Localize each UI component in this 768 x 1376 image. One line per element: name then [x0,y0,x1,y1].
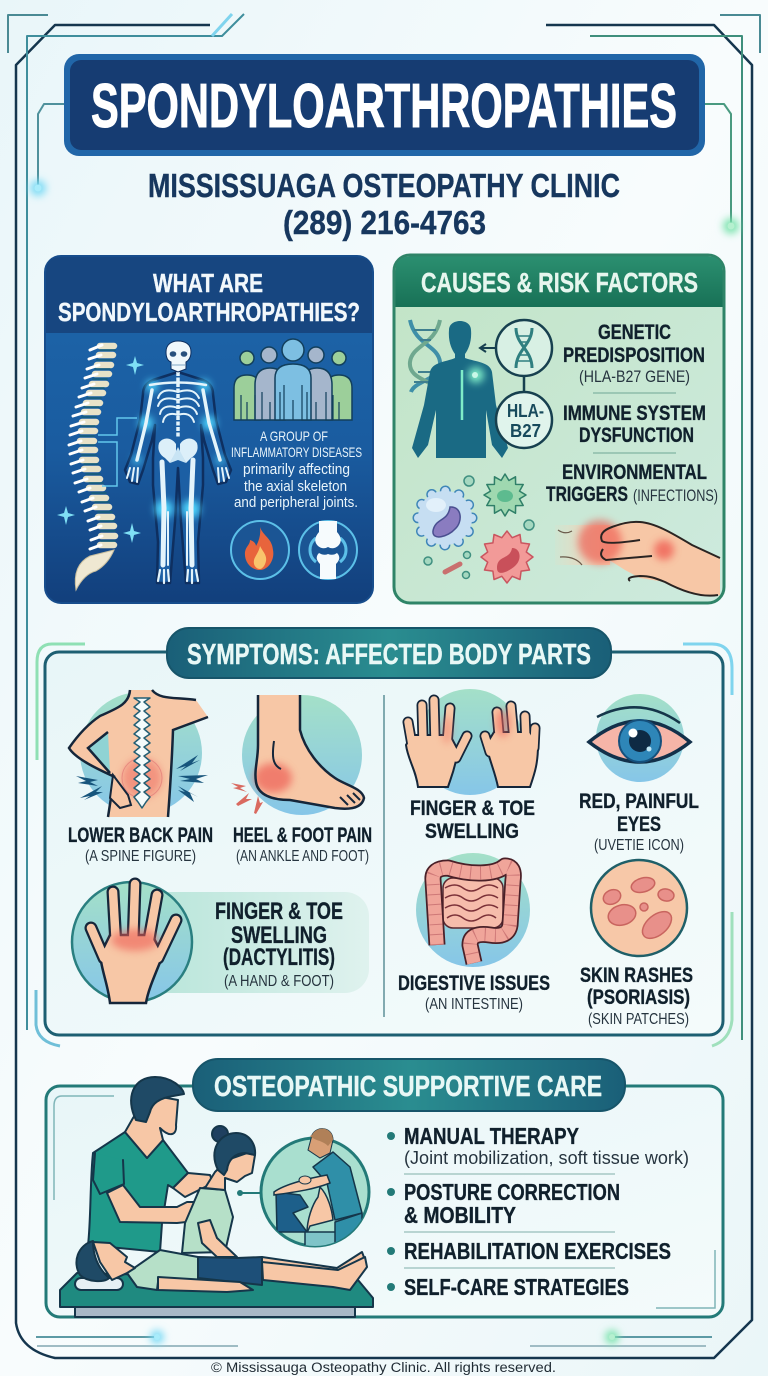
text: description: A GROUP OF [260,428,328,444]
icons: sparkles [57,356,144,543]
treatment table [60,1273,373,1317]
label: skin rashes [580,964,693,1028]
text: immune system dysfunction: DYSFUNCTION [579,424,694,447]
text: immune system dysfunction [563,402,706,447]
title banner [64,54,705,156]
panel: osteopathic supportive care [46,1059,723,1317]
icon: DNA circle [496,320,552,392]
label: red painful eyes: RED, PAINFUL [579,790,699,813]
text: description: and peripheral joints. [234,494,358,511]
item: manual therapy: MANUAL THERAPY [404,1123,579,1149]
symptom: lower back pain [69,690,208,817]
icon: group of people [234,339,352,420]
label: skin rashes: (PSORIASIS) [587,986,690,1009]
label: finger and toe swelling [410,797,535,843]
panel: what are spondyloarthropathies [45,256,373,603]
text: environmental triggers: TRIGGERS [546,483,628,506]
icon: HLA-B27 badge: B27 [510,421,541,441]
label: heel and foot pain [233,824,372,865]
label: heel and foot pain: (AN ANKLE AND FOOT) [236,848,369,865]
icon: immune cells [418,474,534,583]
label: red painful eyes: EYES [617,813,661,836]
icon: HLA-B27 badge [496,392,552,448]
clinic name and phone [148,167,620,241]
label: digestive issues: (AN INTESTINE) [425,996,523,1013]
heading: what are: SPONDYLOARTHROPATHIES? [58,297,360,327]
item: manual therapy [404,1123,689,1168]
label: digestive issues: DIGESTIVE ISSUES [398,972,550,995]
lying patient [76,1241,367,1292]
label: finger and toe swelling: FINGER & TOE [410,797,535,820]
text: genetic predisposition [563,321,705,386]
label: red painful eyes: (UVETIE ICON) [594,837,684,854]
icon: inflamed hand [555,520,720,596]
text: immune system dysfunction: IMMUNE SYSTEM [563,402,706,425]
label: heel and foot pain: HEEL & FOOT PAIN [233,824,372,847]
text: genetic predisposition: PREDISPOSITION [563,344,705,367]
label: finger and toe swelling: SWELLING [425,820,519,843]
heading: what are: WHAT ARE [153,268,263,298]
symptom: red eye [589,694,690,782]
text: description [231,428,362,511]
item: posture correction: & MOBILITY [404,1202,516,1228]
symptom: skin patches [591,860,687,956]
item: manual therapy: (Joint mobilization, soft tissue work) [404,1148,689,1168]
item: rehabilitation: REHABILITATION EXERCISES [404,1238,671,1264]
icon: knee joint [299,521,357,579]
label: lower back pain [68,824,213,865]
icon: HLA-B27 badge: HLA- [507,401,544,421]
text: description: the axial skeleton [244,478,347,495]
heading: symptoms: SYMPTOMS: AFFECTED BODY PARTS [187,639,591,671]
therapist [88,1077,213,1252]
label: skin rashes: (SKIN PATCHES) [588,1011,689,1028]
label: lower back pain: LOWER BACK PAIN [68,824,213,847]
label: red painful eyes [579,790,699,854]
symptom: dactylitis hand and pill: (A HAND & FOOT) [224,973,334,990]
icon: arrow [480,344,496,352]
clinic name and phone: (289) 216-4763 [283,204,486,241]
symptom: dactylitis hand and pill [72,882,369,1003]
label: lower back pain: (A SPINE FIGURE) [85,848,196,865]
symptom: dactylitis hand and pill: (DACTYLITIS) [223,944,335,971]
symptom: dactylitis hand and pill: FINGER & TOE [215,898,343,925]
icon: DNA strand [410,320,440,392]
icon: spine [69,345,115,590]
seated patient [182,1126,255,1257]
heading: care: OSTEOPATHIC SUPPORTIVE CARE [214,1071,602,1103]
connector lines [98,418,137,486]
panel: causes and risk factors [394,255,724,603]
item: self-care: SELF-CARE STRATEGIES [404,1274,629,1300]
care list [387,1123,689,1300]
icon: skeleton figure [125,341,231,583]
heading: care [193,1059,625,1111]
item: posture correction: POSTURE CORRECTION [404,1179,620,1205]
clinic name and phone: MISSISSUAGA OSTEOPATHY CLINIC [148,167,620,204]
symptom: heel and foot pain [231,695,364,815]
text: genetic predisposition: (HLA-B27 GENE) [579,367,690,386]
icon: human silhouette [412,321,508,458]
illustration: treatment scene [60,1077,373,1317]
heading: symptoms [167,628,611,678]
heading: what are [58,268,360,327]
text: genetic predisposition: GENETIC [598,321,671,344]
symptom: swollen hands [406,689,538,795]
item: posture correction [404,1179,620,1228]
connector to inset [237,1190,260,1196]
footer copyright: © Mississauga Osteopathy Clinic. All rights reserved. [211,1360,556,1375]
inset: mobilization circle [261,1129,369,1250]
symptom: dactylitis hand and pill: SWELLING [231,922,327,949]
spine column [134,698,150,808]
label: digestive issues [398,972,550,1013]
panel: symptoms [45,628,723,1035]
text: description: primarily affecting [243,461,350,478]
text: environmental triggers: ENVIRONMENTAL [562,461,707,484]
label: skin rashes: SKIN RASHES [580,964,693,987]
icon: flame [231,521,289,579]
text: environmental triggers [546,461,718,506]
pillow [75,1278,123,1290]
text: environmental triggers: (INFECTIONS) [633,486,718,505]
text: description: INFLAMMATORY DISEASES [231,444,362,460]
symptom: intestine [416,853,530,967]
